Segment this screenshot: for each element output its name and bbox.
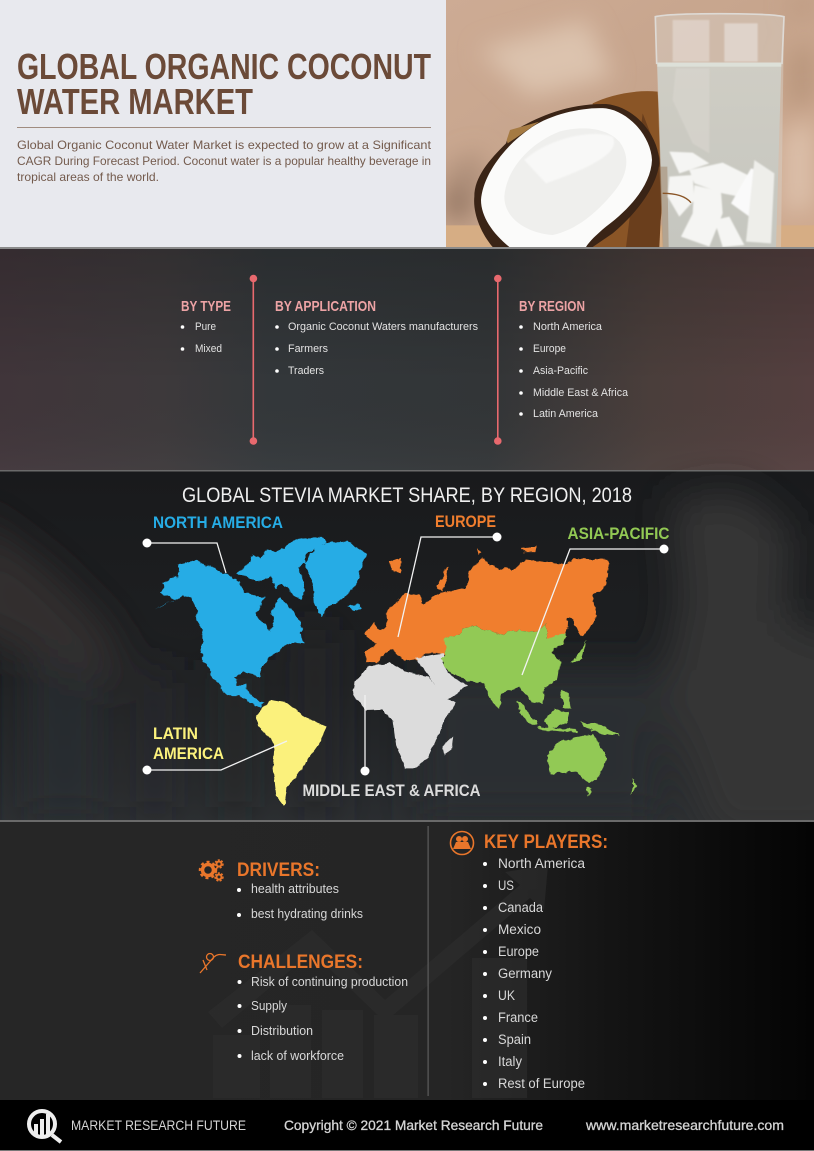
coconut flakes bbox=[668, 152, 774, 247]
challenges: CHALLENGES: bbox=[238, 952, 363, 973]
leader lines bbox=[147, 537, 664, 771]
region labels: NORTH AMERICA bbox=[153, 513, 283, 532]
by type: BY TYPE bbox=[181, 298, 231, 315]
by application: Traders bbox=[288, 365, 324, 377]
footer bbox=[0, 1100, 814, 1151]
key players: KEY PLAYERS: bbox=[484, 832, 608, 853]
by type bbox=[181, 298, 231, 355]
blurred background photo shapes bbox=[0, 490, 814, 840]
chart title: GLOBAL STEVIA MARKET SHARE, BY REGION, 2018 bbox=[182, 484, 632, 507]
key players bbox=[450, 832, 608, 1091]
website: www.marketresearchfuture.com bbox=[585, 1117, 784, 1133]
by application: BY APPLICATION bbox=[275, 298, 376, 315]
key players: Italy bbox=[498, 1054, 522, 1069]
challenges: Supply bbox=[251, 999, 288, 1013]
title: GLOBAL ORGANIC COCONUT bbox=[17, 46, 431, 87]
by region: North America bbox=[533, 321, 603, 333]
challenges bbox=[200, 952, 408, 1063]
icon: gears bbox=[200, 860, 223, 881]
drivers bbox=[200, 860, 363, 921]
by region: Asia-Pacific bbox=[533, 365, 588, 377]
description text: Global Organic Coconut Water Market is expected to grow at a Significant bbox=[17, 138, 432, 152]
header panel bbox=[0, 0, 446, 247]
drivers: health attributes bbox=[251, 882, 339, 896]
by region bbox=[519, 298, 629, 420]
map: asia pacific bbox=[441, 623, 638, 795]
icon: logo bbox=[29, 1111, 61, 1142]
challenges: Risk of continuing production bbox=[251, 975, 408, 989]
drivers: DRIVERS: bbox=[237, 860, 320, 881]
photo: coconut and glass of coconut water bbox=[446, 0, 814, 247]
key players: North America bbox=[498, 856, 585, 871]
region labels: AMERICA bbox=[153, 744, 224, 763]
key players: Germany bbox=[498, 966, 552, 981]
map: middle east and africa bbox=[353, 653, 467, 768]
map: north america bbox=[154, 537, 366, 707]
key players: US bbox=[498, 878, 514, 893]
key players: UK bbox=[498, 988, 515, 1003]
by application: Organic Coconut Waters manufacturers bbox=[288, 321, 478, 333]
challenges: lack of workforce bbox=[251, 1049, 344, 1063]
description text bbox=[17, 127, 432, 184]
coconut half bbox=[474, 104, 659, 247]
panel: world map section bbox=[0, 470, 814, 840]
by type: Pure bbox=[195, 321, 216, 333]
key players: Mexico bbox=[498, 922, 541, 937]
key players: Rest of Europe bbox=[498, 1076, 585, 1091]
region labels: EUROPE bbox=[435, 512, 496, 531]
by region: Latin America bbox=[533, 408, 599, 420]
icon: players bbox=[450, 832, 474, 854]
drivers: best hydrating drinks bbox=[251, 907, 363, 921]
icon: climber bbox=[200, 954, 226, 973]
by application bbox=[275, 298, 478, 377]
key players: France bbox=[498, 1010, 538, 1025]
panel: drivers, challenges, key players bbox=[0, 822, 814, 1100]
divider lines with dots bbox=[250, 275, 502, 445]
glass bbox=[655, 14, 784, 247]
copyright: Copyright © 2021 Market Research Future bbox=[284, 1117, 543, 1133]
title bbox=[17, 46, 431, 122]
description text: CAGR During Forecast Period. Coconut water is a popular healthy beverage in bbox=[17, 154, 431, 168]
by region: BY REGION bbox=[519, 298, 585, 315]
map: europe and russia bbox=[365, 547, 609, 663]
panel: segmentation bbox=[0, 247, 814, 471]
key players: Spain bbox=[498, 1032, 531, 1047]
by type: Mixed bbox=[195, 343, 222, 355]
region labels bbox=[153, 512, 670, 800]
key players: Canada bbox=[498, 900, 543, 915]
description text: tropical areas of the world. bbox=[17, 170, 159, 184]
coconut husk bbox=[592, 91, 662, 247]
company name: MARKET RESEARCH FUTURE bbox=[71, 1117, 246, 1133]
by application: Farmers bbox=[288, 343, 328, 355]
region labels: MIDDLE EAST & AFRICA bbox=[302, 781, 480, 800]
region labels: LATIN bbox=[153, 724, 198, 743]
region labels: ASIA-PACIFIC bbox=[568, 524, 670, 543]
title: WATER MARKET bbox=[17, 81, 253, 122]
by region: Europe bbox=[533, 343, 566, 355]
map: latin america bbox=[257, 700, 327, 807]
world map bbox=[154, 537, 638, 807]
by region: Middle East & Africa bbox=[533, 387, 629, 399]
watermark chart bbox=[208, 865, 548, 1098]
water bbox=[657, 63, 781, 247]
key players: Europe bbox=[498, 944, 539, 959]
challenges: Distribution bbox=[251, 1024, 313, 1038]
